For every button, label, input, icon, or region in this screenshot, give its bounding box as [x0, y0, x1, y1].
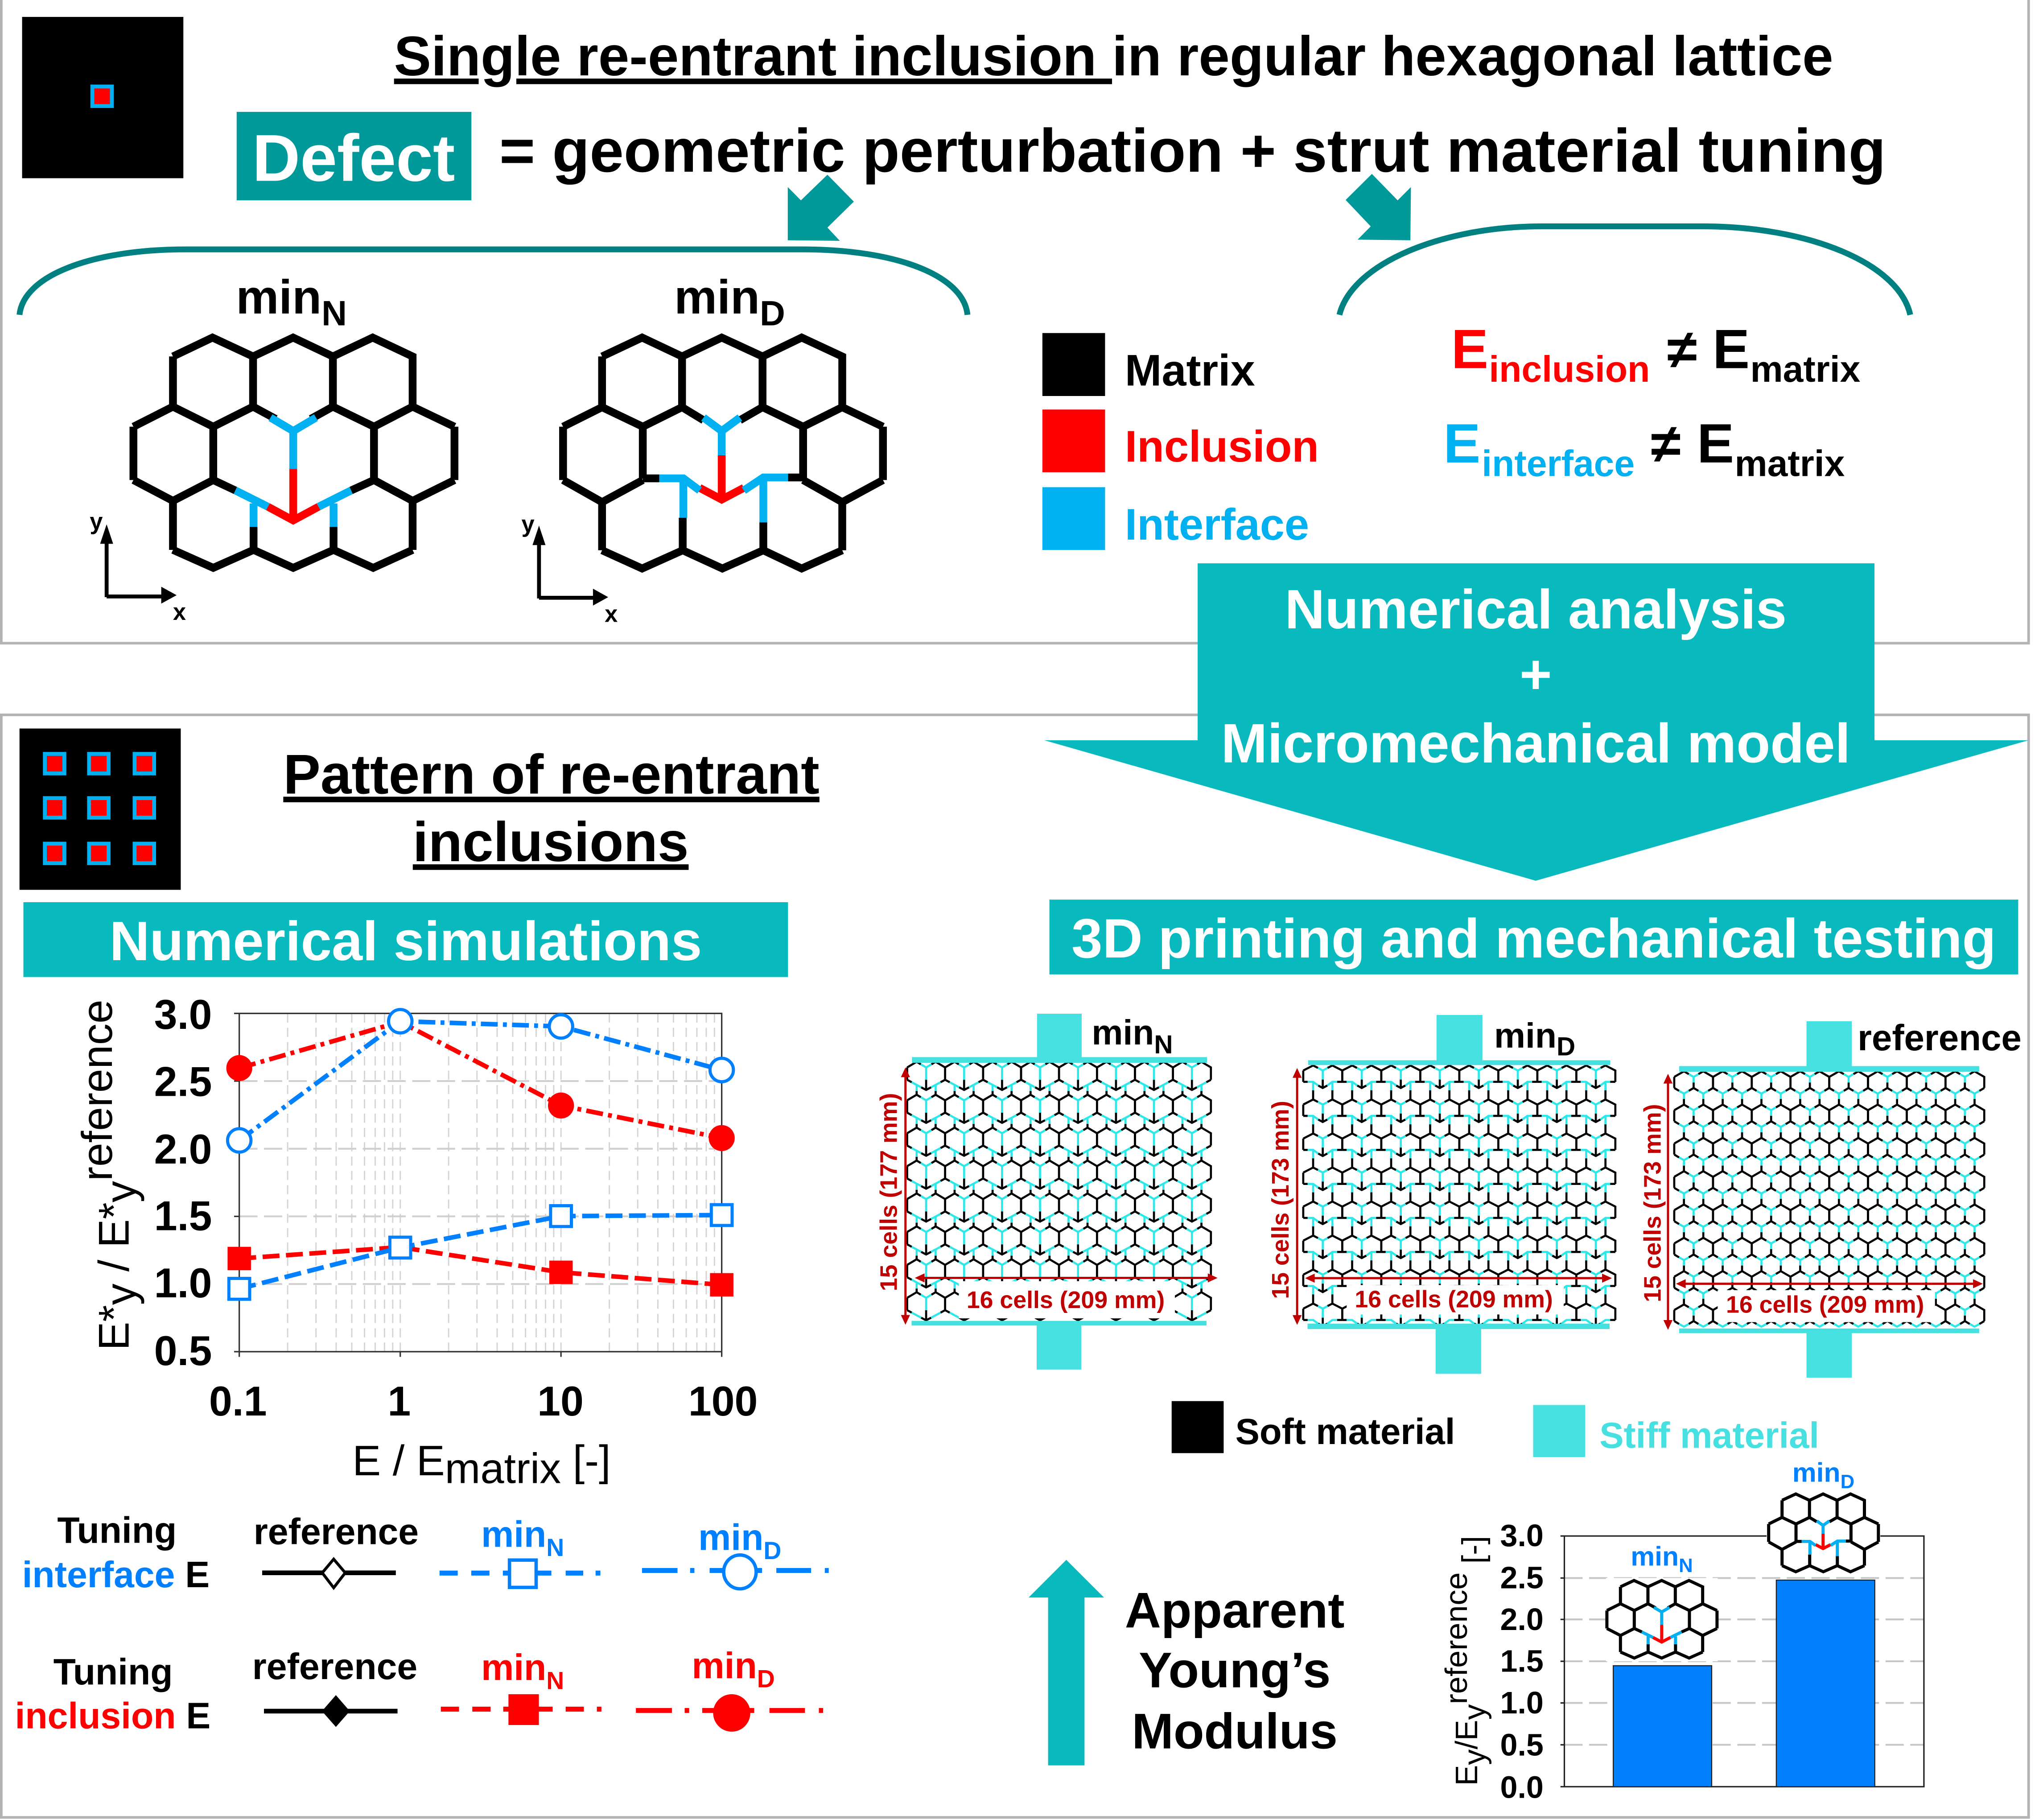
y axis tick labels: [1500, 1518, 1544, 1804]
legend: interface minN: [440, 1514, 601, 1587]
legend label: tuning inclusion E: Tuning: [54, 1652, 173, 1692]
x axis title: [-]: [561, 1437, 611, 1485]
bracket: geometric perturbation: [20, 249, 968, 315]
specimen: minD: [1267, 1015, 1615, 1374]
y axis tick labels: 2.5: [1500, 1560, 1544, 1595]
x axis title: E / E: [352, 1437, 445, 1485]
equation: inclusion modulus: [1451, 318, 1861, 390]
defect equation: = geometric perturbation + strut material tuning: [499, 117, 1886, 185]
legend: interface minN: min: [481, 1514, 546, 1555]
legend label: tuning inclusion E: inclusion E: [15, 1696, 210, 1737]
icon: patterned inclusions: [20, 729, 181, 890]
legend: interface minN: N: [546, 1534, 564, 1561]
legend: soft material: [1172, 1401, 1455, 1453]
equation: interface modulus: ≠: [1651, 413, 1681, 474]
heading: pattern of re-entrant inclusions: [283, 743, 820, 873]
axes: minN: y: [90, 508, 103, 535]
label: minD: D: [1841, 1471, 1854, 1493]
bracket: strut material: [1339, 227, 1910, 315]
label: minN: N: [1679, 1555, 1693, 1577]
y axis tick labels: 0.5: [1500, 1727, 1544, 1762]
text: apparent young's modulus: Apparent: [1125, 1582, 1345, 1638]
dimension: width minD: [1305, 1274, 1612, 1313]
axes: minN: [90, 508, 186, 625]
heading: pattern of re-entrant inclusions: inclusions: [413, 811, 688, 873]
y axis title: E*: [91, 1305, 138, 1350]
defect badge: Defect: [252, 120, 455, 195]
big arrow: numerical analysis and micromechanical model: [1044, 563, 2029, 881]
text: apparent young's modulus: Young’s: [1139, 1642, 1330, 1698]
grips: minD: [1307, 1015, 1610, 1374]
y axis title: reference: [1439, 1572, 1474, 1704]
arrow: apparent modulus up: [1029, 1560, 1104, 1765]
series: inclusion minD: [226, 1022, 735, 1151]
bar: minN: [1613, 1666, 1712, 1787]
dimension: height minN: 15 cells (177 mm): [875, 1093, 902, 1291]
y axis tick labels: 2.0: [154, 1126, 212, 1172]
dimension: height minD: 15 cells (173 mm): [1267, 1101, 1294, 1299]
big arrow: numerical analysis and micromechanical model: +: [1520, 644, 1552, 706]
y axis title: E: [1449, 1765, 1484, 1786]
label: minD: min: [674, 270, 760, 324]
series: inclusion minN: [227, 1247, 733, 1296]
y axis tick labels: 3.0: [154, 991, 212, 1038]
x axis tick labels: 100: [688, 1378, 758, 1424]
x axis tick labels: [209, 1378, 758, 1424]
legend: inclusion minD: [636, 1646, 823, 1732]
label: minD: D: [1557, 1032, 1575, 1061]
dimension: width minN: [915, 1273, 1218, 1313]
axes: minN: x: [173, 599, 186, 625]
equation: interface modulus: E: [1697, 413, 1734, 475]
y axis title: y: [1457, 1750, 1492, 1765]
dimension: height reference: [1639, 1074, 1672, 1330]
axes: minD: x: [605, 601, 618, 627]
dimension: width minN: 16 cells (209 mm): [967, 1287, 1165, 1313]
heading: pattern of re-entrant inclusions: Pattern of re-entrant: [283, 743, 820, 805]
big arrow: numerical analysis and micromechanical model: Micromechanical model: [1221, 712, 1850, 774]
legend: reference interface: [254, 1512, 419, 1588]
legend: stiff material: [1533, 1405, 1819, 1457]
y axis tick labels: 1.5: [154, 1193, 212, 1239]
icon: minD unit: [1769, 1494, 1878, 1572]
bar: minD: [1776, 1580, 1875, 1787]
y axis tick labels: 1.0: [1500, 1685, 1544, 1720]
banner: 3D printing and mechanical testing: 3D printing and mechanical testing: [1071, 908, 1996, 970]
equation: interface modulus: interface: [1482, 444, 1635, 484]
series: interface minN: [229, 1205, 732, 1299]
dimension: height minN: [875, 1067, 910, 1325]
legend: inclusion minD: D: [757, 1665, 775, 1692]
diagram: minN unit: [133, 338, 454, 568]
legend: reference inclusion: reference: [252, 1647, 417, 1687]
legend: interface minD: [642, 1518, 829, 1589]
text: apparent young's modulus: Modulus: [1132, 1703, 1338, 1759]
equation: interface modulus: E: [1443, 413, 1480, 475]
x axis tick labels: 10: [537, 1378, 584, 1424]
lattice: reference: [1674, 1071, 1984, 1327]
legend: stiff material: Stiff material: [1599, 1416, 1819, 1456]
legend: reference inclusion: [252, 1647, 417, 1727]
label: minD: D: [760, 293, 785, 333]
legend: inclusion minD: min: [692, 1646, 757, 1686]
arrow: to geometric perturbation: [788, 175, 854, 241]
axes: minD: [521, 511, 618, 627]
lattice: minD: [1303, 1065, 1615, 1326]
legend: inclusion: [1042, 409, 1319, 472]
y axis title: / E*: [91, 1202, 138, 1283]
legend: reference interface: reference: [254, 1512, 419, 1552]
label: minN: min: [1631, 1541, 1679, 1571]
dimension: height reference: 15 cells (173 mm): [1639, 1104, 1666, 1302]
label: reference: reference: [1858, 1018, 2022, 1058]
chart legend: [15, 1510, 829, 1737]
legend label: tuning inclusion E: [15, 1652, 210, 1737]
y axis tick labels: 0.0: [1500, 1770, 1544, 1804]
label: minN: N: [321, 293, 347, 333]
panel: pattern of inclusions: [1, 715, 2029, 1817]
axes: minD: y: [521, 511, 535, 537]
icon: minN unit: [1607, 1581, 1717, 1658]
equation: inclusion modulus: inclusion: [1489, 349, 1650, 390]
legend: matrix: [1042, 333, 1255, 396]
legend: inclusion minN: [441, 1647, 601, 1725]
panel: single inclusion: [1, 0, 2029, 643]
lattice: minN: [907, 1062, 1211, 1321]
legend: inclusion minN: N: [546, 1667, 564, 1695]
specimen: minN: [875, 1013, 1218, 1370]
y axis title: y: [97, 1181, 144, 1202]
legend: soft material: Soft material: [1236, 1411, 1455, 1452]
legend: interface: [1042, 487, 1309, 550]
y axis tick labels: [154, 991, 212, 1374]
grips: reference: [1679, 1021, 1979, 1378]
y axis tick labels: 2.0: [1500, 1602, 1544, 1637]
grips: minN: [911, 1014, 1207, 1370]
equation: inclusion modulus: matrix: [1751, 349, 1861, 390]
arrow: to strut material tuning: [1346, 174, 1411, 240]
specimen: reference: [1639, 1018, 2022, 1378]
label: minN: N: [1154, 1030, 1173, 1059]
legend: matrix: Matrix: [1125, 346, 1255, 396]
banner: numerical simulations: [23, 902, 788, 977]
y axis title: y: [1457, 1704, 1492, 1720]
equation: inclusion modulus: ≠: [1667, 319, 1697, 380]
banner: numerical simulations: Numerical simulations: [110, 910, 702, 972]
y axis tick labels: 0.5: [154, 1328, 212, 1374]
icon: single inclusion unit: [22, 17, 183, 178]
legend: inclusion: Inclusion: [1125, 422, 1319, 471]
legend label: tuning interface E: interface E: [22, 1555, 210, 1595]
equation: inclusion modulus: E: [1713, 318, 1750, 380]
big arrow: numerical analysis and micromechanical model: Numerical analysis: [1285, 579, 1787, 640]
equation: interface modulus: [1443, 413, 1845, 484]
x axis title: matrix: [445, 1444, 561, 1492]
x axis tick labels: 0.1: [209, 1378, 267, 1424]
y axis title: /E: [1449, 1720, 1484, 1750]
y axis tick labels: 2.5: [154, 1059, 212, 1105]
series: interface minD: [227, 1010, 733, 1152]
line chart: normalized modulus: [74, 991, 758, 1492]
dimension: width minD: 16 cells (209 mm): [1355, 1286, 1553, 1313]
y axis title: reference: [74, 999, 121, 1181]
diagram: minD unit: [563, 338, 883, 569]
y axis title: [-]: [1456, 1536, 1491, 1572]
y axis title: y: [97, 1283, 144, 1305]
text: apparent young's modulus: [1125, 1582, 1345, 1759]
label: minN: min: [236, 270, 321, 324]
dimension: width reference: 16 cells (209 mm): [1726, 1291, 1924, 1318]
legend: inclusion minN: min: [481, 1647, 546, 1688]
dimension: height minD: [1267, 1068, 1302, 1325]
y axis tick labels: 1.0: [154, 1260, 212, 1306]
label: minD: min: [1792, 1457, 1841, 1488]
legend label: tuning interface E: Tuning: [57, 1510, 177, 1551]
label: minN: min: [1092, 1013, 1154, 1052]
label: minD: min: [1494, 1016, 1557, 1055]
title: Single re-entrant inclusion in regular hexagonal lattice: [394, 25, 1833, 87]
legend: interface minD: D: [763, 1537, 781, 1564]
bar chart: apparent modulus: [1439, 1457, 1924, 1804]
y axis tick labels: 1.5: [1500, 1643, 1544, 1678]
equation: interface modulus: matrix: [1735, 444, 1845, 484]
y axis tick labels: 3.0: [1500, 1518, 1544, 1553]
legend: interface minD: min: [698, 1518, 763, 1558]
legend: interface: Interface: [1125, 500, 1309, 549]
x axis tick labels: 1: [387, 1378, 411, 1424]
equation: inclusion modulus: E: [1451, 318, 1488, 380]
legend label: tuning interface E: [22, 1510, 210, 1595]
dimension: width reference: [1676, 1279, 1983, 1318]
